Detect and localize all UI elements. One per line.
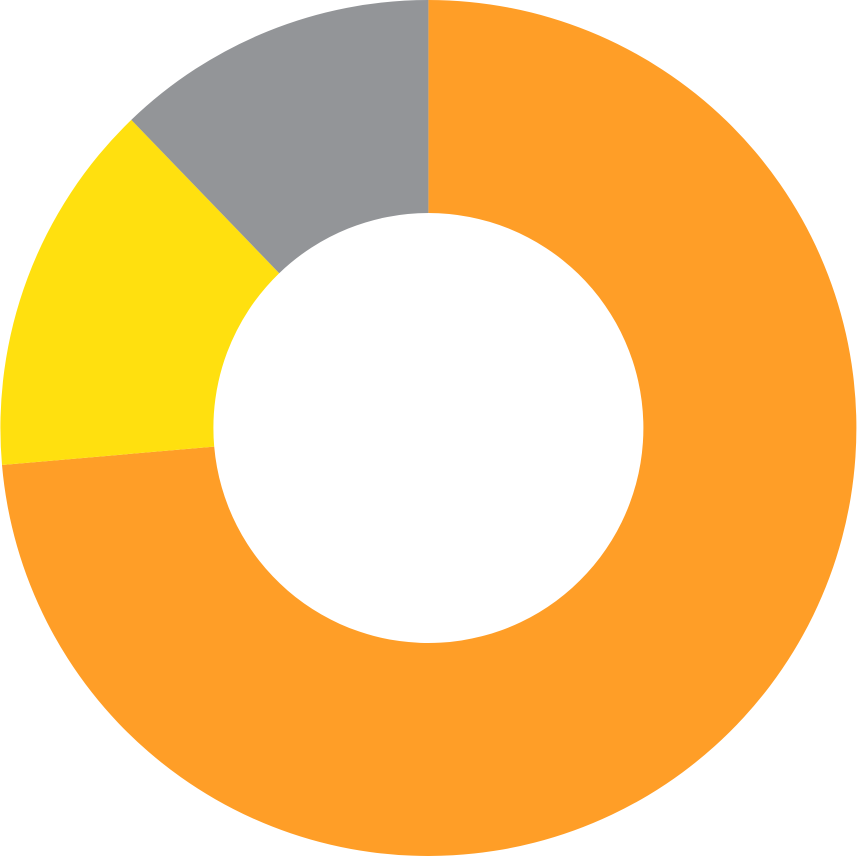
segment: yellow bbox=[0, 120, 279, 465]
segment: gray bbox=[131, 0, 428, 273]
